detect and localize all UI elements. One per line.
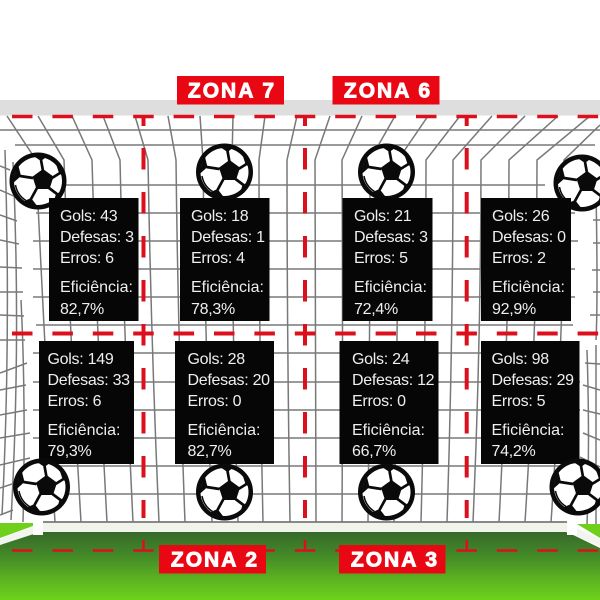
panel: stats top left: 82,7% [60,301,104,318]
panel: stats bottom right: 74,2% [492,443,536,460]
panel: stats bottom left [39,341,134,464]
panel: stats bottom right: Gols: 98 [492,351,549,368]
panel: stats top right: Defesas: 0 [492,229,566,246]
label: zona 7 [177,76,284,104]
panel: stats bottom centre right [340,341,438,464]
label: zona 3 [339,545,446,574]
panel: stats top centre left: Gols: 18 [191,208,249,225]
panel: stats bottom left: Defesas: 33 [48,372,130,389]
panel: stats bottom left: Eficiência: [48,422,120,439]
icon: ball top centre right [358,144,415,200]
panel: stats bottom centre right: Defesas: 12 [352,372,435,389]
label: zona 6 [332,76,440,104]
label: zona 7: ZONA 7 [188,80,276,102]
panel: stats bottom right: Defesas: 29 [492,372,574,389]
icon: ball top left [10,152,66,210]
panel: stats top right: Erros: 2 [492,250,546,267]
panel: stats top centre right: Gols: 21 [354,208,412,225]
panel: stats top left: Gols: 43 [60,208,118,225]
panel: stats bottom centre right: Eficiência: [352,422,425,439]
label: zona 2: ZONA 2 [171,548,259,572]
panel: stats bottom left: Gols: 149 [48,351,114,368]
panel: stats bottom centre left: 82,7% [188,443,232,460]
label: zona 3: ZONA 3 [351,548,439,572]
panel: stats top left [49,198,138,321]
panel: stats top right: Gols: 26 [492,208,550,225]
goal net [0,116,600,530]
panel: stats bottom centre left: Eficiência: [188,422,260,439]
icon: ball top centre left [196,144,253,200]
panel: stats top right [481,198,571,321]
panel: stats top centre left: 78,3% [191,301,235,318]
crossbar [0,100,600,116]
panel: stats top centre right [342,198,432,321]
panel: stats bottom right: Eficiência: [492,422,564,439]
panel: stats bottom centre left [175,341,274,464]
panel: stats bottom centre right: 66,7% [352,443,396,460]
label: zona 2 [159,545,266,574]
panel: stats top centre left: Defesas: 1 [191,229,265,246]
panel: stats bottom left: 79,3% [48,443,92,460]
panel: stats top centre right: Erros: 5 [354,250,408,267]
panel: stats bottom centre left: Gols: 28 [188,351,245,368]
icon: ball bottom centre right [358,464,415,520]
icon: ball bottom centre left [196,464,253,520]
panel: stats top left: Erros: 6 [60,250,114,267]
panel: stats bottom centre left: Defesas: 20 [188,372,270,389]
label: zona 6: ZONA 6 [344,80,432,102]
panel: stats top left: Defesas: 3 [60,229,134,246]
panel: stats bottom right [481,341,580,464]
icon: ball bottom right [550,458,600,516]
zone dividers [12,116,600,550]
panel: stats top centre right: 72,4% [354,301,398,318]
panel: stats top centre left: Eficiência: [191,279,264,296]
panel: stats top centre left [180,198,270,321]
panel: stats bottom right: Erros: 5 [492,393,546,410]
panel: stats bottom centre left: Erros: 0 [188,393,242,410]
panel: stats top right: Eficiência: [492,279,565,296]
ground [0,520,600,600]
panel: stats top left: Eficiência: [60,279,133,296]
panel: stats bottom left: Erros: 6 [48,393,102,410]
panel: stats bottom centre right: Erros: 0 [352,393,406,410]
panel: stats top centre right: Defesas: 3 [354,229,428,246]
panel: stats bottom centre right: Gols: 24 [352,351,410,368]
icon: ball top right [554,154,600,212]
panel: stats top centre right: Eficiência: [354,279,427,296]
panel: stats top centre left: Erros: 4 [191,250,245,267]
panel: stats top right: 92,9% [492,301,536,318]
icon: ball bottom left [13,458,70,516]
